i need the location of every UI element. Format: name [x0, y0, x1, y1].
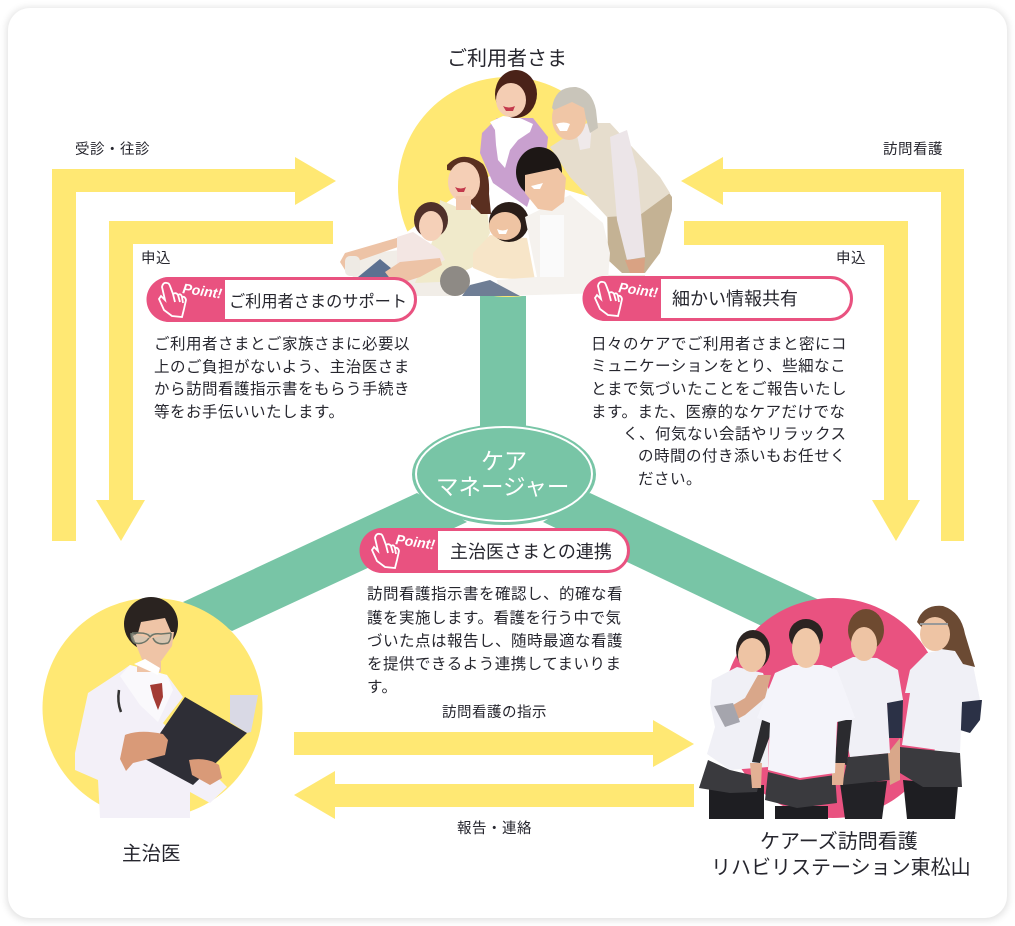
arrow: left 申込 [96, 221, 333, 541]
arrow: 報告・連絡 [294, 771, 694, 819]
label: left 申込: 申込 [141, 250, 171, 267]
dog and jeans [440, 266, 520, 296]
arrow: 訪問看護の指示 [294, 720, 694, 767]
text block: doctor cooperation: 訪問看護指示書を確認し、的確な看 [367, 585, 623, 603]
arrow: 受診・往診 [52, 157, 336, 541]
photo: nurses [699, 606, 982, 819]
pill title: 細かい情報共有 [672, 289, 798, 309]
text block: doctor cooperation [367, 585, 623, 696]
icon: pointing hand [159, 283, 186, 317]
badge: Point!: Point! [395, 531, 436, 553]
green connector: doctor to care manager [183, 493, 467, 631]
point pill: 主治医さまとの連携 [360, 528, 628, 573]
pill title: 主治医さまとの連携 [450, 542, 612, 562]
girl [340, 202, 448, 285]
text block: detailed information sharing: く、何気ない会話やリラックス [623, 425, 847, 443]
text block: user support: から訪問看護指示書をもらう手続き [154, 380, 410, 398]
text block: doctor cooperation: す。 [367, 678, 397, 696]
photo: family [336, 70, 672, 296]
heading: 主治医: 主治医 [122, 843, 181, 865]
text block: user support [154, 335, 410, 421]
photo backing [336, 170, 672, 296]
text block: doctor cooperation: づいた点は報告し、随時最適な看護 [367, 632, 623, 650]
nurse 3 [832, 609, 903, 819]
badge: Point!: Point! [618, 279, 659, 301]
grandmother [480, 70, 548, 207]
care manager ellipse: ケア [481, 448, 527, 474]
photo: doctor [75, 597, 258, 818]
text block: user support: ご利用者さまとご家族さまに必要以 [154, 335, 410, 353]
green connector: nurses to care manager [543, 493, 830, 630]
label: 受診・往診: 受診・往診 [75, 141, 150, 158]
text block: detailed information sharing: ださい。 [638, 470, 702, 488]
yellow circle: doctor [42, 598, 262, 818]
icon: pointing hand [372, 534, 399, 568]
text block: detailed information sharing: とまで気づいたことをご報告いたし [591, 380, 847, 398]
text block: detailed information sharing: ます。また、医療的なケアだけでな [591, 403, 845, 421]
text block: doctor cooperation: 護を実施します。看護を行う中で気 [367, 609, 621, 627]
label: right 申込: 申込 [836, 250, 866, 267]
point pill: ご利用者さまのサポート [146, 277, 416, 322]
care manager ellipse: マネージャー [436, 475, 569, 500]
label: 訪問看護: 訪問看護 [883, 141, 943, 158]
text block: doctor cooperation: を提供できるよう連携してまいりま [367, 655, 621, 673]
heading: ケアーズ訪問看護リハビリステーション東松山 [711, 830, 971, 879]
nurse 1 [699, 630, 771, 819]
icon: pointing hand [595, 282, 622, 316]
green connector: user to care manager [480, 290, 526, 435]
point pill: 細かい情報共有 [582, 276, 852, 321]
pink circle: nurses [723, 598, 943, 818]
grandfather [550, 87, 672, 273]
yellow circle: user [398, 77, 618, 297]
badge: Point!: Point! [182, 280, 223, 302]
label: 報告・連絡: 報告・連絡 [457, 820, 532, 837]
heading: ケアーズ訪問看護リハビリステーション東松山: ケアーズ訪問看護 [760, 830, 918, 853]
text block: user support: 等をお手伝いいたします。 [154, 403, 344, 421]
text block: user support: 上のご負担がないよう、主治医さま [154, 358, 410, 376]
arrow: 訪問看護 [681, 157, 964, 541]
text block: detailed information sharing [591, 335, 847, 488]
nurse 4 [900, 606, 982, 819]
text block: detailed information sharing: ミュニケーションをとり、些細なこ [591, 357, 846, 375]
father [497, 147, 610, 296]
nurse 2 [750, 619, 855, 819]
text block: detailed information sharing: の時間の付き添いもお任せく [638, 447, 846, 465]
care manager ellipse [412, 424, 596, 525]
text block: detailed information sharing: 日々のケアでご利用者さまと密にコ [591, 335, 847, 353]
heading: ケアーズ訪問看護リハビリステーション東松山: リハビリステーション東松山 [711, 856, 971, 879]
mother [415, 157, 491, 283]
heading: ご利用者さま: ご利用者さま [447, 47, 567, 70]
arrow: right 申込 [684, 221, 920, 541]
pill title: ご利用者さまのサポート [229, 293, 407, 311]
boy [473, 202, 535, 280]
label: 訪問看護の指示: 訪問看護の指示 [442, 704, 547, 721]
sofa [345, 250, 645, 296]
